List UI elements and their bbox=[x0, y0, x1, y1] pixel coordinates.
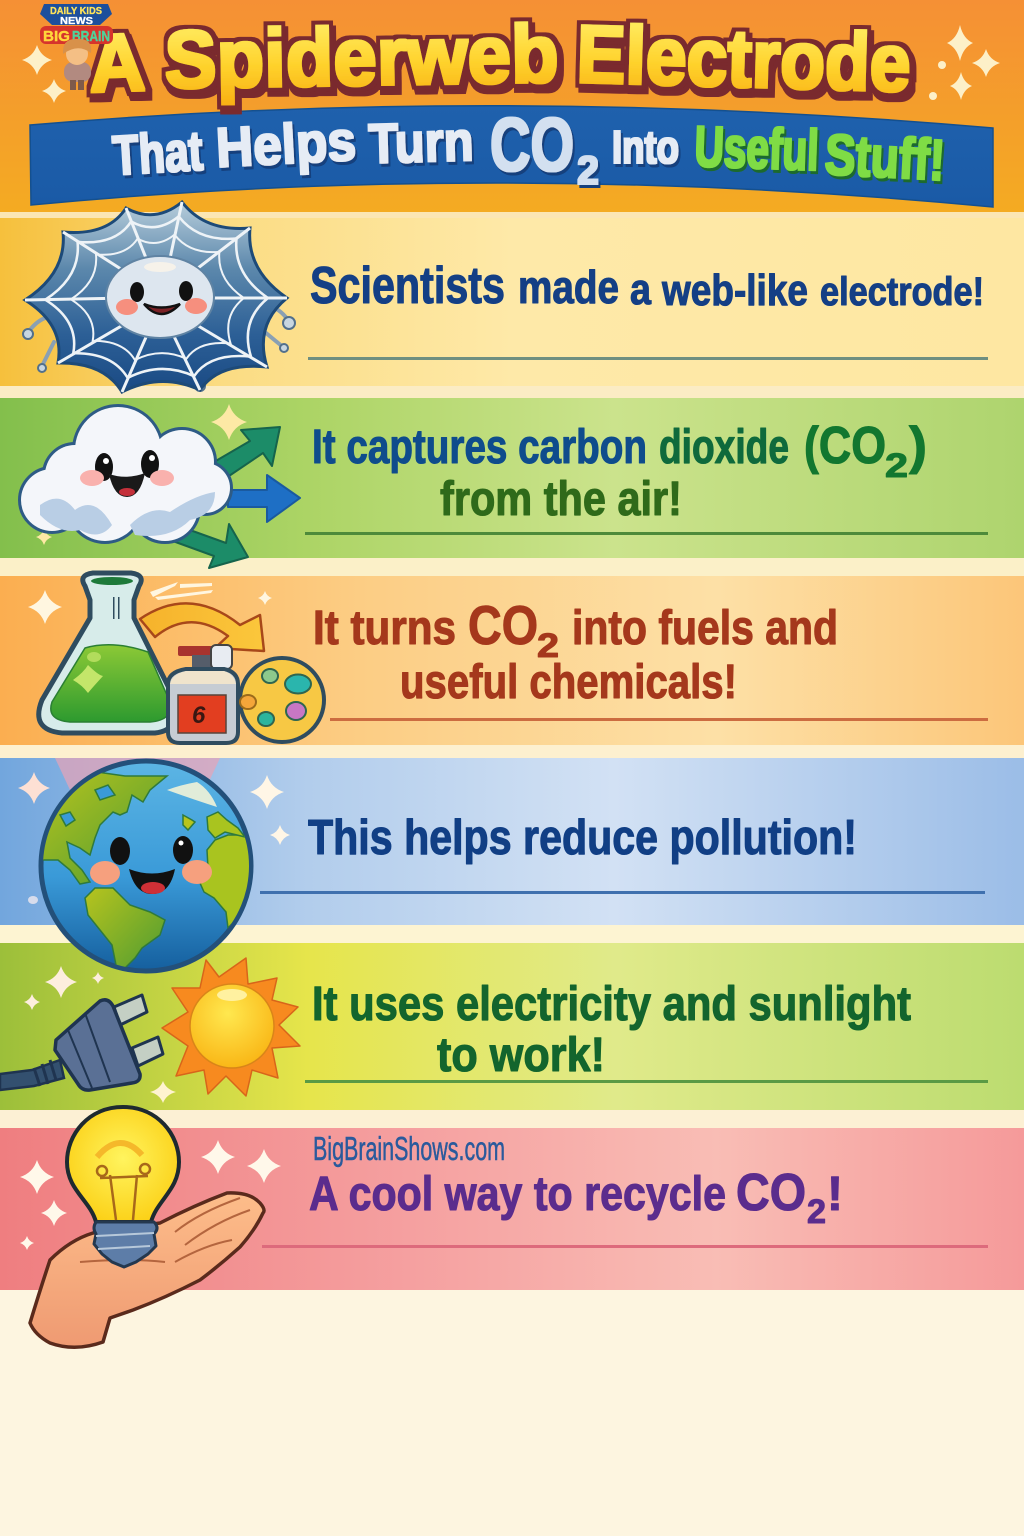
text: captures: 2 bbox=[885, 447, 908, 485]
title: Spiderweb bbox=[164, 9, 559, 106]
subtitle text: Helps bbox=[214, 109, 357, 179]
subtitle text: CO bbox=[490, 103, 574, 188]
sparkles: flask bbox=[28, 582, 272, 624]
website label: BigBrainShows.com bbox=[313, 1130, 505, 1167]
text: captures: (CO bbox=[804, 417, 886, 475]
panel: electricity and sunlight bbox=[0, 943, 1024, 1110]
header panel bbox=[0, 0, 1024, 218]
text: fuels: It turns bbox=[313, 602, 456, 655]
text: scientists: made bbox=[518, 261, 619, 313]
text: captures: ) bbox=[909, 417, 927, 475]
text: electricity bbox=[312, 978, 911, 1082]
sparkles: cloud bbox=[36, 404, 247, 545]
light bulb bbox=[67, 1107, 179, 1267]
title: A bbox=[87, 17, 147, 110]
logo badge: BRAIN bbox=[72, 28, 110, 45]
icon: cloud bbox=[21, 407, 230, 541]
text: captures: dioxide bbox=[659, 421, 789, 474]
hand bbox=[30, 1193, 264, 1347]
logo badge: BIG bbox=[43, 28, 70, 45]
earth face bbox=[90, 836, 212, 894]
icon: spray bottle: 6 bbox=[192, 702, 206, 729]
icon: plug bbox=[0, 995, 163, 1090]
text: scientists: electrode! bbox=[820, 270, 984, 314]
icon: spray bottle bbox=[168, 645, 238, 743]
icon: flask bbox=[39, 573, 176, 733]
text: scientists: a bbox=[630, 265, 651, 314]
subtitle text: Turn bbox=[368, 109, 474, 175]
title: Electrode bbox=[575, 9, 912, 109]
panel: fuels bbox=[0, 573, 1024, 745]
panel: web electrode bbox=[0, 202, 1024, 392]
panel: recycle CO2 bbox=[0, 1128, 1024, 1290]
text: scientists: web-like bbox=[661, 266, 808, 315]
text: fuels: into fuels and bbox=[572, 602, 838, 655]
text: recycle: CO bbox=[736, 1164, 806, 1222]
subtitle text: Into bbox=[612, 121, 679, 173]
spider body face bbox=[106, 256, 214, 338]
text: fuels bbox=[313, 594, 838, 709]
logo badge bbox=[40, 4, 113, 90]
text: captures bbox=[312, 417, 927, 526]
sparkles: bulb bbox=[20, 1140, 281, 1250]
subtitle text: Stuff! bbox=[823, 122, 947, 193]
icon: curved arrow bbox=[140, 603, 264, 651]
panel: captures CO2 bbox=[0, 398, 1024, 568]
sparkles: plug bbox=[24, 966, 176, 1103]
subtitle text: 2 bbox=[577, 149, 599, 193]
icon: spiderweb bbox=[23, 202, 295, 392]
icon: paint palette bbox=[240, 658, 324, 742]
panel: reduce pollution bbox=[0, 758, 1024, 925]
text: scientists bbox=[310, 257, 984, 315]
ribbon banner bbox=[30, 106, 993, 207]
text: recycle: ! bbox=[827, 1168, 843, 1221]
text: pollution: This helps reduce pollution! bbox=[308, 811, 857, 865]
icon: hand holding light bulb bbox=[30, 1107, 264, 1347]
logo badge: DAILY KIDS bbox=[50, 6, 102, 17]
text: recycle: 2 bbox=[807, 1193, 826, 1231]
logo badge: NEWS bbox=[60, 16, 93, 27]
gap strips bbox=[0, 386, 1024, 1128]
icon: sun bbox=[162, 958, 300, 1096]
text: fuels: 2 bbox=[537, 627, 559, 665]
text: captures: It captures carbon bbox=[312, 421, 647, 474]
sparkles: header bbox=[22, 25, 1000, 103]
icon: arrows bbox=[170, 427, 300, 568]
icon: earth globe bbox=[40, 761, 260, 975]
text: scientists: Scientists bbox=[310, 257, 505, 315]
subtitle text bbox=[111, 103, 947, 193]
sparkles: earth bbox=[18, 772, 290, 904]
text: recycle: A cool way to recycle bbox=[309, 1168, 726, 1221]
text: electricity: to work! bbox=[437, 1029, 605, 1082]
subtitle text: Useful bbox=[694, 114, 820, 183]
subtitle text: That bbox=[111, 119, 205, 187]
text: fuels: CO bbox=[468, 594, 538, 656]
text: fuels: useful chemicals! bbox=[400, 656, 737, 709]
title bbox=[87, 9, 912, 110]
text: captures: from the air! bbox=[440, 473, 682, 526]
text: electricity: It uses electricity and sunlight bbox=[312, 978, 911, 1031]
